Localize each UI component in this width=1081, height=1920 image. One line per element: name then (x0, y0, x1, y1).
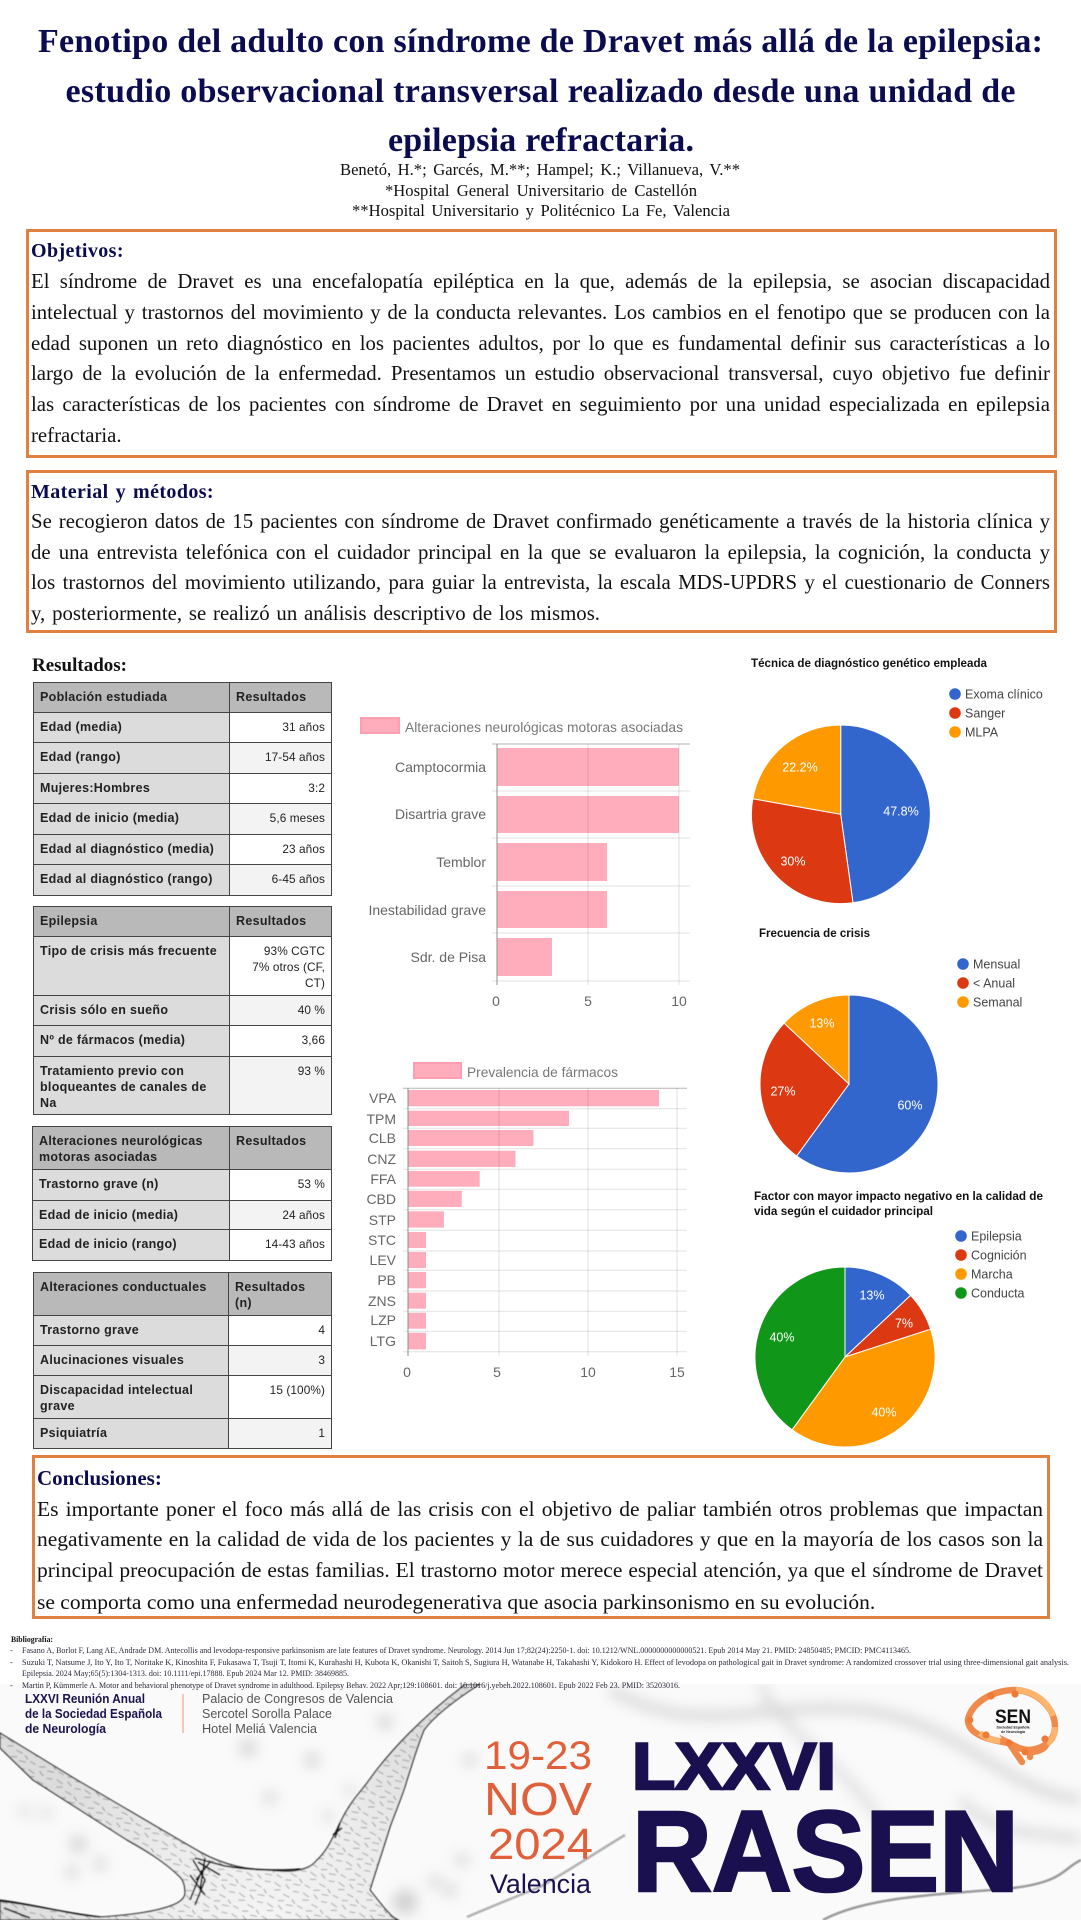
text block: material y métodos: de una entrevista telefónica con el cuidador principal en la que se evaluaron la epilepsia, la cognición, la conducta y (31, 541, 1050, 564)
table: población estudiada: 31 años (282, 720, 325, 734)
text block: objetivos: largo de la evolución de la enfermedad. Presentamos un estudio observacional transversal, cuyo objetivo fue definir (31, 362, 1050, 385)
text block: objetivos: El síndrome de Dravet es una encefalopatía epiléptica en la que, además de la epilepsia, se asocian discapacidad (31, 270, 1050, 293)
text block: conclusiones (37, 1497, 1043, 1614)
bar chart: prevalencia de fármacos: TPM (366, 1111, 396, 1127)
table: alteraciones neurológicas motoras: 24 años (282, 1208, 325, 1222)
legend: técnica: Exoma clínico (965, 688, 1043, 702)
heading: resultados: Resultados: (32, 655, 127, 676)
legend: alteraciones neurológicas: Alteraciones neurológicas motoras asociadas (405, 719, 683, 735)
legend: frecuencia: Mensual (973, 958, 1020, 972)
title: Fenotipo del adulto con síndrome de Dravet más allá de la epilepsia: (38, 23, 1043, 60)
legend: factor: Conducta (971, 1286, 1025, 1300)
pie chart: factor con mayor impacto negativo: 13% (859, 1288, 885, 1302)
heading: objetivos: Objetivos: (31, 240, 124, 262)
banner: congress name: de Neurología (25, 1721, 107, 1736)
table: epilepsia: Epilepsia (40, 914, 98, 928)
table: población estudiada: Población estudiada (40, 690, 167, 704)
legend: técnica: Sanger (965, 706, 1005, 720)
table: alteraciones conductuales: 15 (100%) (270, 1383, 325, 1397)
bibliography: - (10, 1645, 13, 1655)
authors and affiliations (340, 160, 740, 220)
text block: objetivos: edad suponen un reto diagnóstico en los pacientes adultos, por lo que es fundamental definir sus características a lo (31, 332, 1050, 355)
bibliography: Fasano A, Borlot F, Lang AE, Andrade DM. Antecollis and levodopa-responsive parkinsonism are late features of Dravet syndrome. Neurology. 2014 Jun 17;82(24):2250-1. doi: 10.1212/WNL.0000000000000521. Epub 2014 May 21. PMID: 24850485; PMCID: PMC4113465. (22, 1645, 911, 1655)
legend: factor: Marcha (971, 1268, 1013, 1282)
bar chart: prevalencia de fármacos: CLB (369, 1130, 396, 1146)
table: población estudiada: Edad al diagnóstico (media) (40, 842, 214, 856)
text block: objetivos (31, 270, 1050, 447)
bar chart: prevalencia de fármacos: CNZ (367, 1151, 396, 1167)
banner: dates: 2024 (488, 1820, 593, 1869)
banner: blurred neuron background (0, 1684, 1081, 1920)
text block: conclusiones: Es importante poner el foco más allá de las crisis con el objetivo de paliar también otros problemas que impactan (37, 1497, 1043, 1521)
table: población estudiada: Edad al diagnóstico (rango) (40, 872, 213, 886)
pie chart: frecuencia de crisis: Frecuencia de crisis (759, 928, 870, 940)
pie chart: factor con mayor impacto negativo: vida según el cuidador principal (754, 1206, 933, 1218)
pie chart: frecuencia de crisis: 27% (770, 1084, 796, 1098)
heading: conclusiones: Conclusiones: (37, 1466, 162, 1490)
pie chart: factor con mayor impacto negativo: 7% (895, 1316, 913, 1330)
table: epilepsia: 93 % (298, 1064, 325, 1078)
bibliography: Bibliografía: (11, 1634, 53, 1644)
table: epilepsia: Resultados (236, 914, 306, 928)
table: epilepsia: 40 % (298, 1003, 325, 1017)
bibliography: Suzuki T, Natsume J, Ito Y, Ito T, Noritake K, Kinoshita F, Fukasawa T, Tsuji T, Itomi K, Kurahashi H, Kubota K, Okanishi T, Saitoh S, Sugiura H, Watanabe H, Takahashi Y, Kidokoro H. Effect of levodopa on pathological gait in Dravet syndrome: A randomized crossover trial using three-dimensional gait analysis. (22, 1657, 1069, 1667)
text block: objetivos: intelectual y trastornos del movimiento y de la conducta relevantes. Los cambios en el fenotipo que se producen con la (31, 301, 1050, 324)
pie chart: frecuencia de crisis: 60% (897, 1098, 923, 1112)
banner: LXXVI RASEN wordmark (632, 1729, 1019, 1916)
legend: frecuencia: < Anual (973, 976, 1015, 990)
pie chart: factor con mayor impacto negativo (754, 1191, 1043, 1447)
bar chart: prevalencia de fármacos: FFA (370, 1171, 397, 1187)
neuron cell body and dendrites (0, 1684, 480, 1920)
bar chart: alteraciones neurológicas motoras asociadas: Inestabilidad grave (368, 902, 486, 918)
banner: venues: Sercotel Sorolla Palace (202, 1706, 332, 1721)
pie chart: factor con mayor impacto negativo: 40% (871, 1406, 897, 1420)
table: epilepsia: 7% otros (CF, CT) (252, 960, 325, 990)
table: alteraciones neurológicas motoras: Alteraciones neurológicas motoras asociadas (39, 1134, 203, 1164)
icon: SEN brain logo: SEN (995, 1707, 1031, 1728)
text block: conclusiones: negativamente en la calidad de vida de los pacientes y la de sus cuidadores y que en la mayoría de los casos son la (37, 1527, 1043, 1551)
bar chart: alteraciones neurológicas motoras asociadas: Sdr. de Pisa (410, 949, 486, 965)
table: población estudiada: 23 años (282, 842, 325, 856)
bibliography (10, 1634, 1069, 1690)
text block: objetivos: refractaria. (31, 424, 122, 447)
table: población estudiada (33, 682, 332, 896)
bar chart: prevalencia de fármacos: LZP (370, 1312, 396, 1328)
bar chart: prevalencia de fármacos: 15 (669, 1364, 685, 1380)
pie chart: técnica de diagnóstico genético (751, 658, 1043, 904)
banner: venues: Palacio de Congresos de Valencia (202, 1691, 394, 1706)
table: población estudiada: Edad (media) (40, 720, 122, 734)
icon: SEN brain logo: de Neurología (1001, 1730, 1026, 1734)
table: alteraciones conductuales: Alucinaciones visuales (40, 1353, 184, 1367)
bar chart: prevalencia de fármacos: 5 (493, 1364, 501, 1380)
banner: congress name: LXXVI Reunión Anual (25, 1691, 145, 1706)
pie chart: factor con mayor impacto negativo: 40% (769, 1330, 795, 1344)
banner: dates (484, 1734, 593, 1899)
table: alteraciones conductuales: Alteraciones conductuales (40, 1280, 207, 1294)
legend: técnica: MLPA (965, 726, 999, 740)
bar chart: alteraciones neurológicas motoras asociadas (361, 718, 690, 1009)
table: epilepsia: Crisis sólo en sueño (40, 1003, 168, 1017)
pie chart: frecuencia de crisis (759, 928, 1022, 1173)
table: alteraciones neurológicas motoras: 53 % (298, 1177, 325, 1191)
table: epilepsia (33, 906, 332, 1115)
title: estudio observacional transversal realizado desde una unidad de (66, 73, 1016, 110)
banner: congress name: de la Sociedad Española (25, 1706, 163, 1721)
authors and affiliations: Benetó, H.*; Garcés, M.**; Hampel; K.; Villanueva, V.** (340, 160, 740, 179)
table: alteraciones conductuales: 1 (318, 1426, 325, 1440)
legend: prevalencia de fármacos (414, 1063, 618, 1080)
pie chart: técnica de diagnóstico genético: 47.8% (883, 804, 919, 818)
text block: material y métodos (31, 510, 1050, 625)
table: epilepsia: Tratamiento previo con bloqueantes de canales de Na (40, 1064, 207, 1110)
legend: factor: Epilepsia (971, 1230, 1022, 1244)
authors and affiliations: *Hospital General Universitario de Castellón (385, 181, 697, 200)
bibliography: Epilepsia. 2024 May;65(5):1304-1313. doi: 10.1111/epi.17888. Epub 2024 Mar 12. PMID: 38469885. (22, 1668, 349, 1678)
bar chart: prevalencia de fármacos: STP (369, 1212, 396, 1228)
table: alteraciones neurológicas motoras: Resultados (236, 1134, 306, 1148)
banner: LXXVI RASEN wordmark: LXXVI (632, 1729, 836, 1803)
table: alteraciones neurológicas motoras: Edad de inicio (media) (39, 1208, 178, 1222)
table: alteraciones conductuales: 3 (318, 1353, 325, 1367)
pie chart: técnica de diagnóstico genético: 30% (780, 854, 806, 868)
table: alteraciones conductuales: 4 (318, 1323, 325, 1337)
table: población estudiada: Mujeres:Hombres (40, 781, 150, 795)
bar chart: prevalencia de fármacos: ZNS (368, 1293, 396, 1309)
bar chart: alteraciones neurológicas motoras asociadas: Temblor (436, 854, 486, 870)
panel: material y métodos (26, 470, 1057, 633)
table: epilepsia: 3,66 (302, 1033, 325, 1047)
title (38, 23, 1043, 159)
table: población estudiada: Resultados (236, 690, 306, 704)
table: alteraciones conductuales: Resultados (n) (235, 1280, 305, 1310)
legend: técnica (949, 688, 1043, 740)
table: alteraciones conductuales: Psiquiatría (40, 1426, 107, 1440)
table: población estudiada: 6-45 años (272, 872, 325, 886)
table: alteraciones neurológicas motoras (32, 1126, 332, 1261)
legend: factor: Cognición (971, 1248, 1027, 1262)
bar chart: prevalencia de fármacos: PB (377, 1272, 396, 1288)
bar chart: prevalencia de fármacos: 10 (580, 1364, 596, 1380)
table: alteraciones conductuales: Discapacidad intelectual grave (40, 1383, 193, 1413)
bar chart: prevalencia de fármacos (366, 1063, 687, 1380)
text block: material y métodos: Se recogieron datos de 15 pacientes con síndrome de Dravet confirmado genéticamente a través de la historia clínica y (31, 510, 1050, 533)
bar chart: prevalencia de fármacos: 0 (403, 1364, 411, 1380)
text block: material y métodos: los trastornos del movimiento utilizando, para guiar la entrevista, la escala MDS-UPDRS y el cuestionario de Conners (31, 571, 1050, 594)
banner: venues (202, 1691, 394, 1736)
graphics layer: charts, bibliography and banner (0, 658, 1081, 1920)
banner: venues: Hotel Meliá Valencia (202, 1721, 318, 1736)
text block: material y métodos: y, posteriormente, se realizó un análisis descriptivo de los mismos. (31, 602, 600, 625)
bar chart: prevalencia de fármacos: LTG (370, 1333, 396, 1349)
table: población estudiada: Edad de inicio (media) (40, 811, 179, 825)
legend: frecuencia (957, 958, 1022, 1010)
table: epilepsia: 93% CGTC (264, 944, 325, 958)
pie chart: técnica de diagnóstico genético: Técnica de diagnóstico genético empleada (751, 658, 988, 670)
bar chart: prevalencia de fármacos: VPA (369, 1090, 397, 1106)
table: población estudiada: 17-54 años (265, 750, 325, 764)
pie chart: factor con mayor impacto negativo: Factor con mayor impacto negativo en la calidad de (754, 1191, 1043, 1203)
bibliography: Martin P, Kümmerle A. Motor and behavioral phenotype of Dravet syndrome in adulthood. Epilepsy Behav. 2022 Apr;129:108601. doi: 10.1016/j.yebeh.2022.108601. Epub 2022 Feb 23. PMID: 35203016. (22, 1680, 680, 1690)
icon: SEN brain logo: Sociedad Española (997, 1726, 1030, 1730)
table: epilepsia: Nº de fármacos (media) (40, 1033, 185, 1047)
text block: objetivos: las características de los pacientes con síndrome de Dravet en seguimiento por una unidad especializada en epilepsia (31, 393, 1050, 416)
bibliography: - (10, 1657, 13, 1667)
bar chart: prevalencia de fármacos: STC (368, 1232, 396, 1248)
table: alteraciones neurológicas motoras: 14-43 años (265, 1237, 325, 1251)
table: alteraciones neurológicas motoras: Trastorno grave (n) (39, 1177, 159, 1191)
bibliography: - (10, 1680, 13, 1690)
title: epilepsia refractaria. (388, 122, 694, 159)
banner: LXXVI RASEN wordmark: RASEN (632, 1788, 1019, 1916)
table: alteraciones neurológicas motoras: Edad de inicio (rango) (39, 1237, 177, 1251)
legend: factor (955, 1230, 1027, 1300)
table: alteraciones conductuales (33, 1272, 332, 1449)
banner: dates: NOV (484, 1773, 592, 1825)
banner: dates: 19-23 (484, 1734, 592, 1778)
text block: conclusiones: se comporta como una enfermedad neurodegenerativa que asocia parkinsonismo en su evolución. (37, 1590, 875, 1614)
table: población estudiada: 3:2 (308, 781, 325, 795)
banner: congress name (25, 1691, 163, 1736)
icon: SEN brain logo (967, 1690, 1055, 1762)
table: epilepsia: Tipo de crisis más frecuente (40, 944, 217, 958)
bar chart: alteraciones neurológicas motoras asociadas: 10 (671, 993, 687, 1009)
bar chart: prevalencia de fármacos: CBD (366, 1191, 396, 1207)
table: alteraciones conductuales: Trastorno grave (40, 1323, 139, 1337)
pie chart: frecuencia de crisis: 13% (809, 1016, 835, 1030)
panel: objetivos (26, 229, 1057, 458)
bar chart: alteraciones neurológicas motoras asociadas: Disartria grave (395, 806, 486, 822)
heading: material y métodos: Material y métodos: (31, 481, 214, 503)
bar chart: alteraciones neurológicas motoras asociadas: Camptocormia (395, 759, 486, 775)
bar chart: alteraciones neurológicas motoras asociadas: 5 (584, 993, 592, 1009)
bar chart: alteraciones neurológicas motoras asociadas: 0 (492, 993, 500, 1009)
banner: dates: Valencia (490, 1869, 592, 1899)
table: población estudiada: Edad (rango) (40, 750, 121, 764)
bar chart: prevalencia de fármacos: LEV (370, 1252, 397, 1268)
table: población estudiada: 5,6 meses (270, 811, 325, 825)
legend: prevalencia de fármacos: Prevalencia de fármacos (467, 1064, 618, 1080)
authors and affiliations: **Hospital Universitario y Politécnico La Fe, Valencia (352, 201, 730, 220)
legend: frecuencia: Semanal (973, 996, 1022, 1010)
panel: conclusiones (32, 1455, 1050, 1619)
pie chart: técnica de diagnóstico genético: 22.2% (782, 760, 818, 774)
text block: conclusiones: principal preocupación de estas familias. El trastorno motor merece especial atención, ya que el síndrome de Dravet (37, 1558, 1043, 1582)
